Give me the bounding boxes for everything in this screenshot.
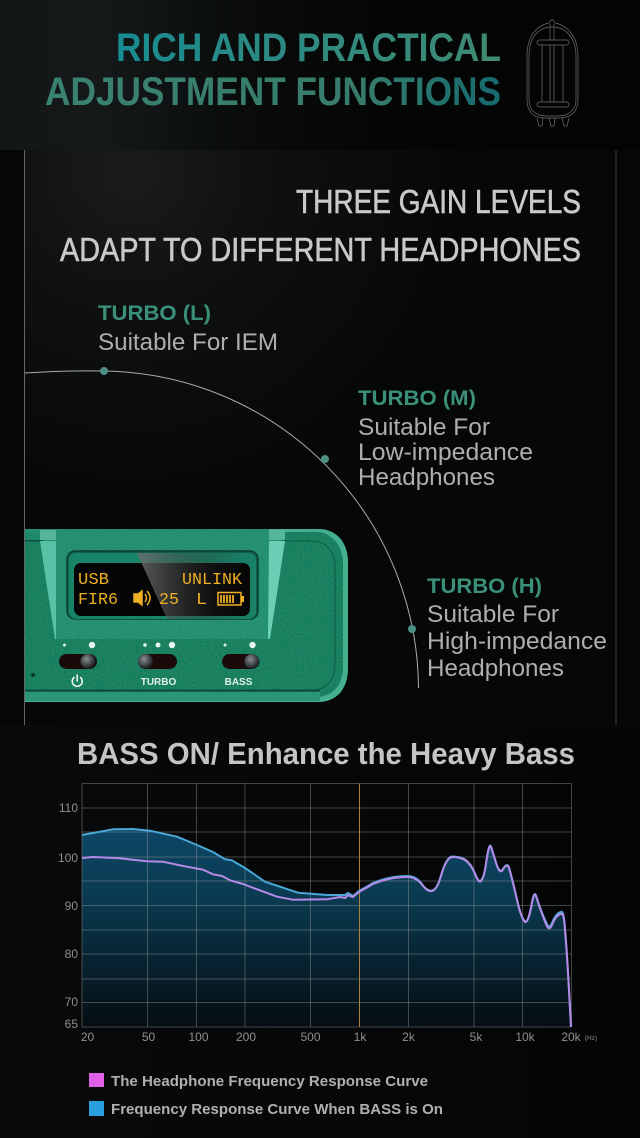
x axis labels: 1k (354, 1030, 367, 1044)
heading: three gain levels: ADAPT TO DIFFERENT HEADPHONES (60, 231, 581, 268)
x axis labels: 20k (561, 1030, 582, 1044)
chart: frequency response (58, 784, 597, 1044)
label: turbo M: Headphones (358, 464, 495, 491)
icon: battery (218, 592, 244, 605)
title: RICH AND PRACTICAL (116, 26, 501, 70)
switch: power (59, 642, 97, 686)
x axis labels: (Hz) (585, 1035, 597, 1042)
title: ADJUSTMENT FUNCTIONS (45, 70, 501, 114)
switch: bass: BASS (225, 677, 253, 688)
legend (89, 1073, 443, 1118)
curve: bass on (82, 829, 571, 1027)
y axis labels: 100 (58, 851, 78, 865)
heading: bass on: BASS ON/ Enhance the Heavy Bass (77, 736, 575, 771)
y axis labels: 80 (65, 947, 78, 961)
area fill under curves (82, 829, 571, 1027)
x axis labels: 500 (300, 1030, 321, 1044)
y axis labels: 90 (65, 899, 78, 913)
label: turbo L: TURBO (L) (98, 302, 211, 325)
display: L (196, 590, 207, 609)
heading: three gain levels (60, 183, 581, 268)
display (74, 553, 256, 619)
label: turbo H (427, 575, 607, 682)
x axis labels: 5k (470, 1030, 483, 1044)
legend item: bass curve: Frequency Response Curve When BASS is On (111, 1101, 443, 1118)
switch: bass (222, 642, 260, 688)
x axis labels: 20 (81, 1030, 94, 1044)
x axis labels (81, 1030, 597, 1044)
gain arc with markers (25, 367, 418, 688)
x axis labels: 200 (236, 1030, 256, 1044)
icon: vacuum tube (527, 20, 578, 126)
y axis labels (58, 801, 78, 1031)
switch: turbo: TURBO (141, 677, 176, 688)
screen bezel (42, 531, 284, 639)
icon: speaker (134, 591, 150, 605)
label: turbo M (358, 387, 533, 491)
heading: three gain levels: THREE GAIN LEVELS (296, 183, 581, 220)
display: UNLINK (182, 570, 242, 589)
y axis labels: 110 (59, 801, 78, 815)
label: turbo H: Suitable For (427, 601, 559, 628)
label: turbo M: TURBO (M) (358, 387, 476, 410)
x axis labels: 50 (142, 1030, 155, 1044)
label: turbo L: Suitable For IEM (98, 329, 278, 356)
label: turbo H: TURBO (H) (427, 575, 542, 598)
label: turbo H: High-impedance (427, 628, 607, 655)
legend item: headphone curve: The Headphone Frequency Response Curve (111, 1073, 428, 1090)
curve: headphone response (82, 846, 571, 1027)
y axis labels: 65 (65, 1017, 78, 1031)
label: turbo M: Suitable For (358, 414, 490, 441)
x axis labels: 100 (188, 1030, 209, 1044)
switch: turbo (138, 642, 177, 688)
y axis labels: 70 (65, 995, 78, 1009)
label: turbo L (98, 302, 278, 356)
display: USB (78, 570, 109, 589)
display: 25 (159, 590, 179, 609)
display: FIR6 (78, 590, 118, 609)
device: amplifier front panel (25, 529, 348, 702)
label: turbo M: Low-impedance (358, 439, 533, 466)
label: turbo H: Headphones (427, 655, 564, 682)
x axis labels: 2k (402, 1030, 416, 1044)
title (45, 26, 501, 114)
x axis labels: 10k (515, 1030, 536, 1044)
